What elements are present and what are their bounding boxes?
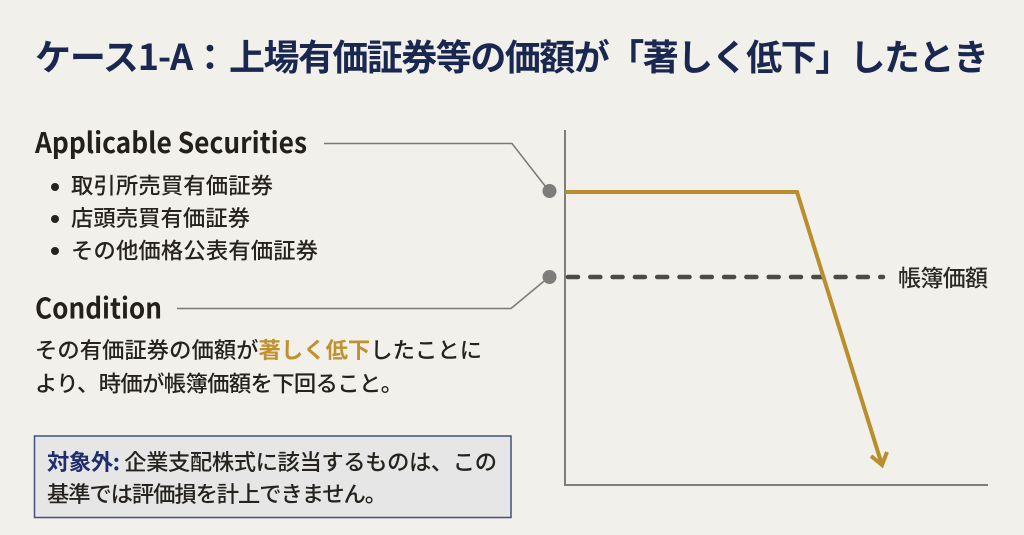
- marker: market price: [542, 184, 556, 198]
- heading: condition: Condition: [35, 286, 162, 328]
- callout box: [34, 436, 511, 518]
- dashed line: book value: [568, 275, 883, 279]
- panel: applicable securities: [34, 121, 318, 266]
- heading: applicable securities: Applicable Securities: [34, 121, 307, 162]
- leader line: condition: [177, 277, 549, 308]
- list item 2: 店頭売買有価証券: [71, 201, 250, 233]
- callout: exclusion: [34, 436, 511, 518]
- callout line 2: 基準では評価損を計上できません。: [47, 477, 387, 509]
- list item 1: 取引所売買有価証券: [71, 168, 273, 200]
- title: ケース1-A：: [35, 29, 228, 81]
- chart axes: [565, 130, 988, 485]
- bullet list: [51, 168, 318, 266]
- leader line: applicable securities: [324, 144, 549, 191]
- title: 上場有価証券等の価額が「著しく低下」したとき: [229, 29, 989, 81]
- label: book value: 帳簿価額: [898, 259, 988, 293]
- chart: price decline: [565, 130, 988, 485]
- marker: book value: [542, 270, 556, 284]
- list item 3: その他価格公表有価証券: [71, 234, 318, 266]
- panel: condition: [35, 286, 482, 398]
- condition text: その有価証券の価額が著しく低下したことに: [35, 333, 482, 365]
- condition text line 2: より、時価が帳簿価額を下回ること。: [35, 366, 403, 398]
- price line with arrow: [565, 192, 887, 465]
- callout line 1: 対象外: 企業支配株式に該当するものは、この: [47, 445, 497, 477]
